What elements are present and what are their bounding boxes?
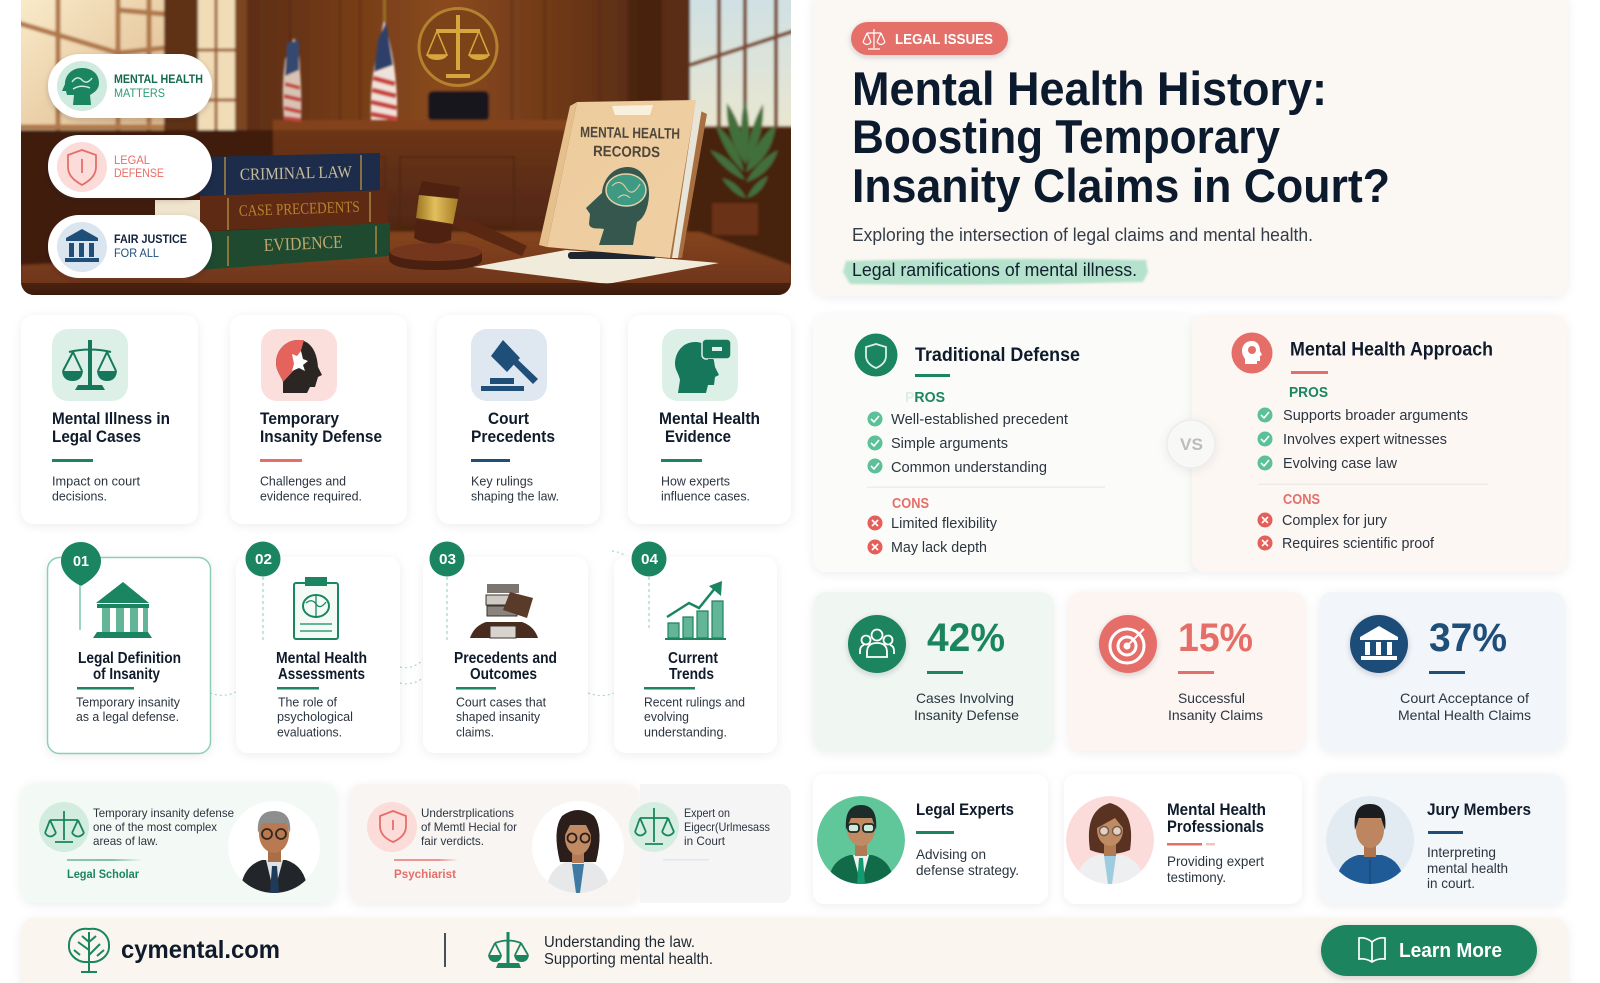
folder head icon xyxy=(586,167,649,245)
step description: The role of xyxy=(278,694,337,710)
icon: scales xyxy=(635,808,674,844)
pros list: Common understanding xyxy=(891,459,1047,476)
quote text: in Court xyxy=(684,834,726,848)
step card 04: current trends xyxy=(614,542,777,753)
pill: fair justice xyxy=(48,215,212,278)
quote author: Legal Scholar xyxy=(67,867,139,881)
pros list: Involves expert witnesses xyxy=(1283,431,1447,448)
title: Boosting Temporary xyxy=(852,110,1280,163)
step badge 03 xyxy=(430,542,464,640)
icon: green head with brain xyxy=(62,68,99,105)
panel: title xyxy=(813,0,1568,296)
step badge 03: 03 xyxy=(439,551,456,568)
stat label: Successful xyxy=(1178,690,1245,706)
role description: Interpreting xyxy=(1427,844,1496,860)
step title xyxy=(78,650,181,683)
card: court precedents xyxy=(437,315,600,524)
step badge 01: 01 xyxy=(73,553,89,570)
icon: head with speech bubble xyxy=(675,339,731,393)
button: learn more xyxy=(1321,925,1537,976)
role description: Providing expert xyxy=(1167,853,1264,869)
card title: Temporary xyxy=(260,409,339,428)
quote text: fair verdicts. xyxy=(421,834,484,848)
tagline: Supporting mental health. xyxy=(544,951,713,968)
step description xyxy=(456,694,546,740)
card title: Legal Cases xyxy=(52,427,141,446)
quote text: of Memtl Hecial for xyxy=(421,820,517,834)
icon: courthouse xyxy=(1360,626,1398,660)
stat label xyxy=(1398,690,1531,723)
card description xyxy=(52,474,140,504)
card: mental illness in legal cases xyxy=(21,315,198,524)
step description: psychological xyxy=(277,709,353,724)
step description: Court cases that xyxy=(456,694,546,710)
mental health records folder: MENTAL HEALTH xyxy=(580,124,680,143)
role title: Jury Members xyxy=(1427,801,1531,819)
step badge 04 xyxy=(632,542,666,630)
stat label: Insanity Defense xyxy=(914,707,1019,723)
card title: Mental Illness in xyxy=(52,409,170,428)
card description xyxy=(260,474,362,504)
quote text: Temporary insanity defense xyxy=(93,806,234,820)
mental health records folder: RECORDS xyxy=(593,143,660,161)
quote text: areas of law. xyxy=(93,834,158,848)
pros list: Supports broader arguments xyxy=(1283,407,1468,424)
title xyxy=(852,62,1390,212)
table front edge xyxy=(21,283,791,295)
card title xyxy=(471,409,555,446)
icon: courthouse xyxy=(65,229,99,262)
pill: mental health matters: MENTAL HEALTH xyxy=(114,74,203,86)
step card 01: legal definition xyxy=(48,542,210,754)
heading: Mental Health Approach xyxy=(1290,338,1493,360)
badge: legal issues: LEGAL ISSUES xyxy=(895,32,993,48)
footer bar xyxy=(21,918,1568,983)
site name: cymental.com xyxy=(121,936,280,964)
step badge 04: 04 xyxy=(641,551,659,568)
role title: Professionals xyxy=(1167,818,1264,836)
pill: mental health matters xyxy=(48,54,212,118)
quote text xyxy=(684,806,770,848)
connector dots between step cards xyxy=(210,551,626,696)
icon: scales xyxy=(62,340,117,390)
card description: evidence required. xyxy=(260,488,362,504)
card description: Impact on court xyxy=(52,474,140,488)
highlighted line: Legal ramifications of mental illness. xyxy=(852,260,1137,280)
mental health records folder xyxy=(539,100,707,258)
cons list: May lack depth xyxy=(891,539,987,556)
law books: CASE PRECEDENTS xyxy=(239,199,360,220)
card description: Challenges and xyxy=(260,474,346,488)
role description: mental health xyxy=(1427,860,1508,876)
avatar: professional xyxy=(1066,796,1154,884)
quote author: Psychiarist xyxy=(394,867,456,881)
quote text: one of the most complex xyxy=(93,820,217,834)
step card 02: mental health assessments xyxy=(236,542,400,753)
step description: Recent rulings and xyxy=(644,694,745,710)
role card: mental health professionals xyxy=(1064,792,1302,906)
badge: legal issues xyxy=(851,22,1008,55)
stat label: Mental Health Claims xyxy=(1398,707,1531,723)
avatar: legal expert xyxy=(817,796,905,884)
icon: shield xyxy=(68,150,96,185)
step description: evaluations. xyxy=(277,724,342,740)
vs badge xyxy=(1167,420,1215,468)
step badge 02 xyxy=(246,542,280,640)
icon: scales xyxy=(45,811,84,842)
step title: Legal Definition xyxy=(78,650,181,667)
icon: brain tree logo xyxy=(69,929,109,972)
pill: legal defense: DEFENSE xyxy=(114,168,164,180)
quote text xyxy=(421,806,517,848)
quote card: expert xyxy=(629,784,791,903)
pill: fair justice: FAIR JUSTICE xyxy=(114,234,187,246)
icon: shield xyxy=(380,811,406,842)
icon: target xyxy=(1110,629,1144,663)
stat value: 42% xyxy=(927,616,1005,660)
role description xyxy=(1167,853,1264,885)
stat label xyxy=(914,690,1019,723)
card title xyxy=(52,409,170,446)
vs badge: VS xyxy=(1180,435,1203,454)
cons heading: CONS xyxy=(1283,492,1320,508)
card title xyxy=(659,409,760,446)
step title xyxy=(668,650,718,683)
step description xyxy=(644,694,745,740)
step title: of Insanity xyxy=(93,666,160,683)
card description: influence cases. xyxy=(661,488,750,504)
role title: Legal Experts xyxy=(916,801,1014,819)
pill: mental health matters: MATTERS xyxy=(114,88,165,100)
stat value: 37% xyxy=(1429,616,1507,660)
card title: Precedents xyxy=(471,427,555,446)
role description: Advising on xyxy=(916,846,986,862)
button: learn more: Learn More xyxy=(1399,939,1502,962)
stat label xyxy=(1168,690,1263,723)
step title: Assessments xyxy=(278,666,365,683)
gavel xyxy=(389,181,527,270)
avatar: legal scholar xyxy=(228,801,320,893)
stat label: Insanity Claims xyxy=(1168,707,1263,723)
step description: as a legal defense. xyxy=(76,709,179,724)
icon: gavel xyxy=(481,340,538,391)
stat label: Cases Involving xyxy=(916,690,1014,706)
quote text: Expert on xyxy=(684,806,730,820)
pill: legal defense xyxy=(48,135,212,198)
pros list xyxy=(868,411,1069,476)
role description: testimony. xyxy=(1167,869,1226,885)
step description: claims. xyxy=(456,724,494,740)
step description: evolving xyxy=(644,709,689,724)
role description xyxy=(916,846,1019,878)
card description xyxy=(661,474,750,504)
title: Mental Health History: xyxy=(852,62,1327,115)
gold scales seal xyxy=(419,8,497,86)
pros heading: PROS xyxy=(905,390,945,406)
avatar: psychiatrist xyxy=(532,801,624,893)
quote text xyxy=(93,806,234,848)
icon: scales xyxy=(488,932,529,968)
papers and pen xyxy=(473,250,719,284)
cons list: Limited flexibility xyxy=(891,515,997,532)
cons list: Requires scientific proof xyxy=(1282,535,1435,552)
quote card: legal scholar xyxy=(21,783,337,903)
icon: clipboard xyxy=(294,577,338,639)
step title: Mental Health xyxy=(276,650,367,667)
icon: rising bar chart xyxy=(665,581,726,639)
icon: head badge xyxy=(1232,332,1272,374)
card: temporary insanity defense xyxy=(230,315,407,524)
card description: Key rulings xyxy=(471,474,533,488)
step description xyxy=(277,694,353,740)
step title xyxy=(454,650,557,683)
step title: Outcomes xyxy=(470,666,537,683)
pros list: Simple arguments xyxy=(891,435,1008,452)
title: Insanity Claims in Court? xyxy=(852,159,1390,212)
step badge 02: 02 xyxy=(255,551,272,568)
step badge 01 xyxy=(61,542,101,630)
pros heading: PROS xyxy=(1289,385,1328,401)
step description: shaped insanity xyxy=(456,709,540,724)
pill: fair justice: FOR ALL xyxy=(114,248,160,260)
panel: mental health approach xyxy=(1192,315,1567,572)
stat card: 15 percent xyxy=(1068,592,1305,751)
card: mental health evidence xyxy=(628,315,791,524)
step title: Trends xyxy=(669,666,714,683)
role description xyxy=(1427,844,1508,891)
stat card: 37 percent xyxy=(1319,592,1565,751)
card description: shaping the law. xyxy=(471,488,559,504)
card description: How experts xyxy=(661,474,730,488)
pros list xyxy=(1258,407,1468,472)
stat card: 42 percent xyxy=(813,592,1054,751)
step description: understanding. xyxy=(644,724,727,740)
avatar: juror xyxy=(1326,796,1414,884)
card title: Mental Health xyxy=(659,409,760,428)
card title xyxy=(260,409,382,446)
pros list: Evolving case law xyxy=(1283,455,1397,472)
courtroom background xyxy=(15,0,797,300)
role card: legal experts xyxy=(812,792,1048,906)
cons list: Complex for jury xyxy=(1282,512,1387,529)
pros list: Well-established precedent xyxy=(891,411,1069,428)
step title: Current xyxy=(668,650,718,667)
icon: open book xyxy=(1359,938,1385,962)
flags xyxy=(283,0,397,120)
icon: people xyxy=(860,630,894,657)
icon: books and gavel xyxy=(470,584,538,638)
pill: legal defense: LEGAL xyxy=(114,155,151,167)
cons list xyxy=(868,515,997,556)
cons list xyxy=(1258,512,1435,552)
icon: shield badge xyxy=(854,334,898,376)
hero courtroom image xyxy=(15,0,797,300)
law books: CRIMINAL LAW xyxy=(240,162,353,184)
cons heading: CONS xyxy=(892,496,929,512)
icon: courthouse xyxy=(93,582,152,638)
law books xyxy=(155,153,390,270)
quote text: Understrplications xyxy=(421,806,514,820)
card description: decisions. xyxy=(52,488,107,504)
quote card: psychiatrist xyxy=(349,784,640,903)
law books: EVIDENCE xyxy=(263,232,343,255)
role description: in court. xyxy=(1427,875,1475,891)
icon: head with burst xyxy=(276,340,322,393)
tagline: Understanding the law. xyxy=(544,934,695,951)
card title: Court xyxy=(488,409,529,428)
subtitle: Exploring the intersection of legal claims and mental health. xyxy=(852,225,1313,245)
role title xyxy=(1167,801,1266,836)
tagline xyxy=(544,934,713,968)
stat value: 15% xyxy=(1178,616,1253,660)
role card: jury members xyxy=(1319,774,1564,904)
step card 03: precedents and outcomes xyxy=(423,542,588,753)
card description xyxy=(471,474,559,504)
role description: defense strategy. xyxy=(916,862,1019,878)
step title xyxy=(276,650,367,683)
step description xyxy=(76,694,180,724)
heading: Traditional Defense xyxy=(915,344,1080,366)
panel: traditional defense xyxy=(813,315,1198,572)
role title: Mental Health xyxy=(1167,801,1266,819)
step description: Temporary insanity xyxy=(76,694,180,710)
stat label: Court Acceptance of xyxy=(1400,690,1529,706)
card title: Evidence xyxy=(665,427,731,446)
step title: Precedents and xyxy=(454,650,557,667)
card title: Insanity Defense xyxy=(260,427,382,446)
quote text: Eigecr(Urlmesass xyxy=(684,820,770,834)
